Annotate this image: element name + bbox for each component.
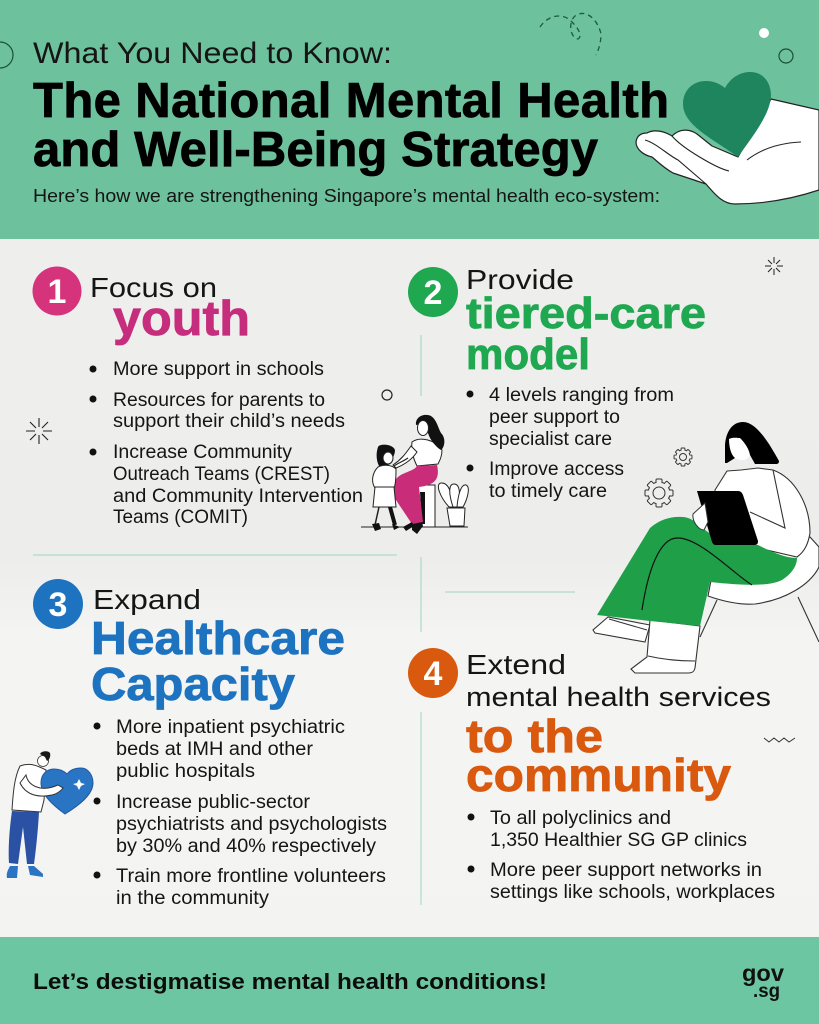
decoration: squiggle bbox=[764, 738, 795, 742]
heading 1: youth bbox=[113, 292, 250, 346]
head bbox=[38, 756, 48, 766]
woman hair bbox=[416, 415, 444, 450]
number badge 2: 2 bbox=[424, 274, 442, 312]
bullet list 3: More inpatient psychiatric bbox=[116, 717, 345, 738]
child face bbox=[383, 452, 393, 464]
bullet list 4: 1,350 Healthier SG GP clinics bbox=[490, 830, 747, 851]
shirt bbox=[12, 764, 46, 812]
icon: hand holding heart bbox=[636, 72, 819, 204]
bullet list 4 bbox=[468, 808, 775, 903]
decoration: small ring bbox=[382, 390, 392, 400]
trousers bbox=[597, 517, 797, 626]
footer band bbox=[0, 937, 819, 1024]
bullet list 1: and Community Intervention bbox=[113, 486, 363, 507]
heading 2: Provide bbox=[466, 264, 574, 295]
panel: extend services to the community bbox=[408, 648, 795, 903]
bullet list 1 bbox=[90, 359, 363, 528]
heading 2: tiered-care bbox=[466, 289, 706, 338]
bullet list 1: Outreach Teams (CREST) bbox=[113, 464, 330, 485]
heading 3: Capacity bbox=[91, 658, 295, 710]
heading 2 bbox=[466, 264, 706, 379]
panel: focus on youth bbox=[26, 266, 468, 534]
number badge 1 bbox=[32, 266, 82, 316]
logo: gov.sg bbox=[742, 960, 784, 1002]
bullet list 2: to timely care bbox=[489, 481, 607, 502]
logo: gov.sg: gov bbox=[742, 960, 784, 986]
child hair bbox=[377, 445, 395, 466]
bullet list 1: Increase Community bbox=[113, 442, 293, 463]
trousers bbox=[9, 811, 39, 864]
bullet list 2: peer support to bbox=[489, 407, 620, 428]
bullet list 3: in the community bbox=[116, 888, 270, 909]
sparkle bbox=[73, 779, 85, 790]
heading 1 bbox=[90, 272, 250, 346]
illustration: woman with tablet on chair bbox=[593, 422, 819, 673]
bullet list 3: public hospitals bbox=[116, 761, 255, 782]
heading 4: Extend bbox=[466, 649, 566, 680]
tablet bbox=[697, 491, 758, 545]
footer call to action: Let’s destigmatise mental health conditions! bbox=[33, 969, 547, 994]
decoration: white dot bbox=[759, 28, 769, 38]
number badge 1: 1 bbox=[48, 273, 66, 311]
hand on tablet bbox=[693, 503, 708, 530]
torso and arm bbox=[712, 468, 810, 557]
bullet list 3: Increase public-sector bbox=[116, 792, 311, 813]
decoration: ring left bbox=[0, 42, 13, 68]
woman trousers bbox=[392, 465, 438, 524]
bullet list 2: 4 levels ranging from bbox=[489, 385, 674, 406]
icon: large gear bbox=[645, 479, 673, 507]
decorative dividers bbox=[33, 335, 575, 905]
stool bbox=[418, 485, 435, 527]
main title: The National Mental Health bbox=[33, 74, 669, 128]
heading 3 bbox=[91, 584, 345, 710]
header subtitle: Here’s how we are strengthening Singapore’s mental health eco-system: bbox=[33, 185, 660, 206]
arm bbox=[20, 775, 63, 796]
bullet list 4: To all polyclinics and bbox=[490, 808, 671, 829]
decoration: sunburst right bbox=[765, 257, 783, 275]
header kicker: What You Need to Know: bbox=[33, 37, 392, 70]
hair bbox=[40, 751, 50, 761]
number badge 3: 3 bbox=[49, 586, 67, 624]
panel: expand healthcare capacity bbox=[7, 579, 387, 909]
number badge 2 bbox=[408, 267, 458, 317]
bullet list 1: Resources for parents to bbox=[113, 390, 325, 411]
bullet list 1: More support in schools bbox=[113, 359, 324, 380]
panel: tiered-care model bbox=[408, 257, 819, 673]
heading 3: Healthcare bbox=[91, 612, 345, 664]
bullet list 3 bbox=[94, 717, 387, 909]
bullet list 3: beds at IMH and other bbox=[116, 739, 314, 760]
shoes bbox=[7, 866, 43, 878]
feet bbox=[593, 617, 650, 642]
hair bbox=[725, 422, 779, 464]
bullet list 1: support their child’s needs bbox=[113, 411, 345, 432]
bullet list 2: Improve access bbox=[489, 459, 624, 480]
plant bbox=[438, 483, 468, 526]
face bbox=[729, 438, 750, 460]
woman face bbox=[418, 420, 428, 436]
woman top bbox=[412, 439, 442, 466]
heading 3: Expand bbox=[93, 584, 201, 615]
child dress bbox=[373, 465, 396, 488]
bullet list 4: settings like schools, workplaces bbox=[490, 882, 775, 903]
heading 1: Focus on bbox=[90, 272, 217, 303]
icon: small gear bbox=[674, 448, 692, 466]
number badge 4: 4 bbox=[424, 655, 443, 693]
illustration: man hugging blue heart bbox=[7, 751, 93, 878]
child legs bbox=[375, 507, 379, 525]
bullet list 3: Train more frontline volunteers bbox=[116, 866, 386, 887]
logo: gov.sg: .sg bbox=[753, 981, 780, 1002]
bullet list 2: specialist care bbox=[489, 429, 612, 450]
bullet list 1: Teams (COMIT) bbox=[113, 507, 248, 528]
decoration: dashed curl bbox=[540, 13, 601, 55]
blue heart bbox=[41, 768, 93, 814]
number badge 3 bbox=[33, 579, 83, 629]
illustration: mother and child bbox=[361, 415, 468, 534]
heading 4: mental health services bbox=[466, 682, 771, 712]
decoration: ring right bbox=[779, 49, 793, 63]
bullet list 3: by 30% and 40% respectively bbox=[116, 836, 377, 857]
main title: and Well-Being Strategy bbox=[33, 123, 598, 177]
heading 4 bbox=[466, 649, 771, 801]
number badge 4 bbox=[408, 648, 458, 698]
header band bbox=[0, 0, 819, 239]
bullet list 2 bbox=[466, 385, 674, 502]
heading 4: to the bbox=[466, 710, 603, 762]
bullet list 4: More peer support networks in bbox=[490, 860, 762, 881]
heading 4: community bbox=[466, 749, 731, 801]
chair bbox=[708, 537, 819, 604]
main title bbox=[33, 74, 669, 177]
bullet list 3: psychiatrists and psychologists bbox=[116, 814, 387, 835]
decoration: sunburst left bbox=[26, 418, 52, 444]
heading 2: model bbox=[466, 330, 590, 379]
